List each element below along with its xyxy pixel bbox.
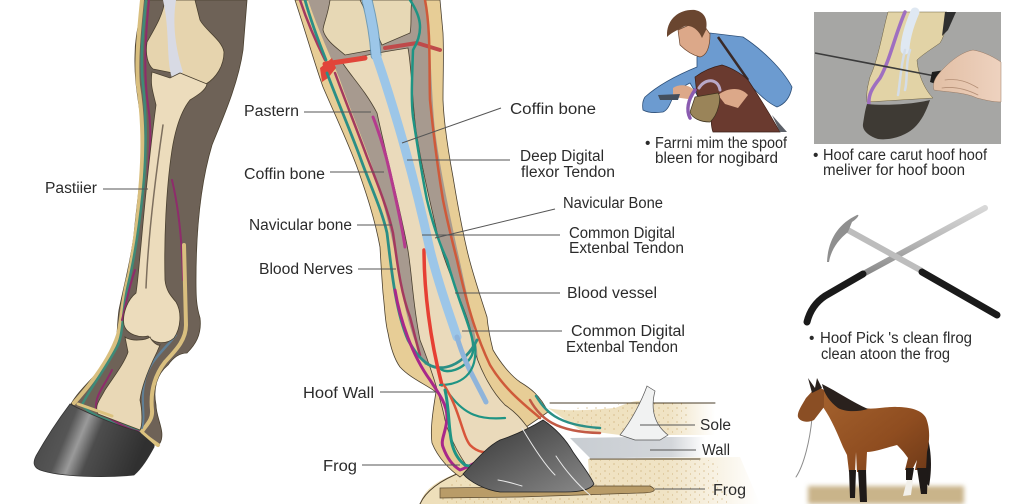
sole and frog ground panels [420, 386, 760, 504]
label: Coffin bone left: Coffin bone [244, 166, 325, 183]
model hoof upper [867, 12, 947, 102]
probe handle [930, 70, 945, 84]
black curved grip [807, 274, 863, 322]
dark rear stripe [942, 12, 956, 36]
lower frog sand [420, 457, 760, 504]
body and neck [822, 390, 929, 472]
label: Common Digital Extenbal Tendon upper: Extenbal Tendon [569, 240, 684, 257]
label: Pastiier [45, 180, 148, 197]
rear vessels to hoof bulb [536, 396, 600, 428]
ground [808, 486, 964, 504]
caption: farrier [645, 135, 788, 167]
apron side shade [772, 115, 787, 132]
illustration: crossed hoof tools [807, 208, 997, 322]
caption: hoof pick: clean atoon the frog [821, 346, 950, 363]
illustration: left leg side view [34, 0, 247, 477]
magenta vessel [96, 0, 183, 432]
grey wall layer [570, 437, 705, 458]
label: Sole: Sole [700, 417, 731, 434]
label: Frog right: Frog [713, 482, 746, 499]
blue-grey vessels rear [142, 335, 176, 428]
label: Navicular Bone [435, 195, 663, 238]
caption: hoof care: Hoof care carut hoof hoof [823, 147, 988, 164]
label: Common Digital Extenbal Tendon upper [422, 225, 684, 257]
label: Wall [650, 442, 730, 459]
label: Hoof Wall: Hoof Wall [303, 385, 374, 402]
pastern bone [97, 337, 160, 430]
label: Common Digital Extenbal Tendon lower [462, 323, 685, 356]
teal ties near fetlock [440, 345, 505, 418]
neck and face [678, 20, 710, 57]
label: Navicular bone left: Navicular bone [249, 217, 352, 234]
caption: farrier: • [645, 135, 650, 152]
purple vessel [869, 12, 905, 105]
illustration: farrier trimming a hoof [643, 10, 792, 132]
left hand [673, 85, 695, 99]
front legs [849, 470, 867, 502]
label: Sole [640, 417, 731, 434]
lead rope [796, 418, 812, 477]
teal vessel left [305, 0, 477, 368]
leg skin band [295, 0, 548, 477]
label: Blood Nerves: Blood Nerves [259, 261, 353, 278]
illustration: central leg cross-section [295, 0, 760, 504]
upper joint bones [146, 0, 224, 84]
leg skin silhouette [71, 0, 247, 450]
apron right strap [718, 37, 748, 80]
outer red-orange vessel right [425, 0, 540, 418]
crimson vessel left [300, 0, 420, 355]
upper joint bone left [323, 0, 372, 55]
frog brown [440, 486, 654, 498]
caption: hoof care: meliver for hoof boon [823, 162, 965, 179]
caption: hoof care: • [813, 147, 818, 164]
magenta vessel lower [395, 290, 510, 470]
cannon bones [124, 72, 207, 343]
front tan skin band [74, 0, 142, 403]
mane [822, 384, 868, 411]
pick black handle [922, 272, 997, 315]
pick head [827, 215, 858, 262]
ears [808, 378, 822, 393]
sand layer upper [548, 401, 715, 435]
label: Common Digital Extenbal Tendon lower: Extenbal Tendon [566, 339, 678, 356]
upper joint bone right [360, 0, 412, 45]
label: Deep Digital flexor Tendon: flexor Tendon [521, 164, 615, 181]
main long bone [342, 48, 530, 470]
probe [815, 53, 935, 76]
label: Deep Digital flexor Tendon [407, 148, 615, 181]
apron bib and skirt [695, 65, 780, 132]
label: Coffin bone upper [402, 101, 596, 143]
label: Frog left: Frog [323, 458, 357, 475]
tendon [905, 12, 915, 50]
hand [933, 50, 1001, 102]
rear legs [906, 468, 928, 494]
illustration: bay horse standing [796, 378, 964, 504]
label: Frog left [323, 458, 460, 475]
dark gap between bones [146, 125, 163, 288]
label: Common Digital Extenbal Tendon lower: Common Digital [571, 323, 685, 340]
inner grey-brown cavity [308, 0, 478, 365]
purple rim [688, 90, 695, 118]
hair [667, 10, 707, 38]
pliers [658, 94, 680, 100]
label: Deep Digital flexor Tendon: Deep Digital [520, 148, 604, 165]
label: Coffin bone upper: Coffin bone [510, 101, 596, 118]
label: Frog right [655, 482, 746, 499]
pale tendon strip rear [141, 245, 186, 445]
caption: hoof pick [809, 330, 972, 363]
photo: hoof care with probe [814, 12, 1001, 144]
label: Common Digital Extenbal Tendon upper: Common Digital [569, 225, 675, 242]
head [798, 386, 824, 422]
lower orange and teal loops [444, 385, 495, 452]
label: Pastern [244, 103, 371, 120]
tail [921, 432, 931, 486]
hoof white highlights [498, 428, 590, 495]
blue tendon [367, 0, 376, 55]
hoof rim tan strip [78, 404, 157, 445]
magenta vessel inner [373, 117, 405, 247]
white sock [903, 480, 913, 496]
caption: hoof care [813, 147, 988, 179]
label: Pastern: Pastern [244, 103, 299, 120]
green vessel right [410, 0, 473, 371]
label: Blood Nerves [259, 261, 396, 278]
caption: hoof pick: • [809, 330, 814, 347]
pick silver shaft [846, 229, 922, 271]
green vessel [82, 0, 146, 430]
label: Hoof Wall [303, 385, 436, 402]
finger creases [942, 79, 978, 95]
hoof dark wedge [463, 420, 594, 492]
red artery central [424, 250, 442, 385]
label: Wall: Wall [702, 442, 730, 459]
label: Navicular Bone: Navicular Bone [563, 195, 663, 212]
hoof held [690, 93, 720, 122]
grey backdrop [814, 12, 1001, 144]
label: Pastiier: Pastiier [45, 180, 97, 197]
right hand [718, 89, 748, 108]
label: Coffin bone left [244, 166, 384, 183]
long silver rod [865, 208, 985, 273]
white tendon in joint [163, 0, 183, 78]
caption: farrier: Farrni mim the spoof [655, 135, 788, 152]
white cartilage [620, 386, 668, 440]
black hoof [863, 100, 930, 139]
shirt torso and arms [643, 33, 792, 113]
caption: farrier: bleen for nogibard [655, 150, 778, 167]
label: Blood vessel: Blood vessel [567, 285, 657, 302]
caption: hoof pick: Hoof Pick 's clean flrog [820, 330, 972, 347]
red artery top [325, 58, 365, 64]
hoof [34, 404, 154, 477]
